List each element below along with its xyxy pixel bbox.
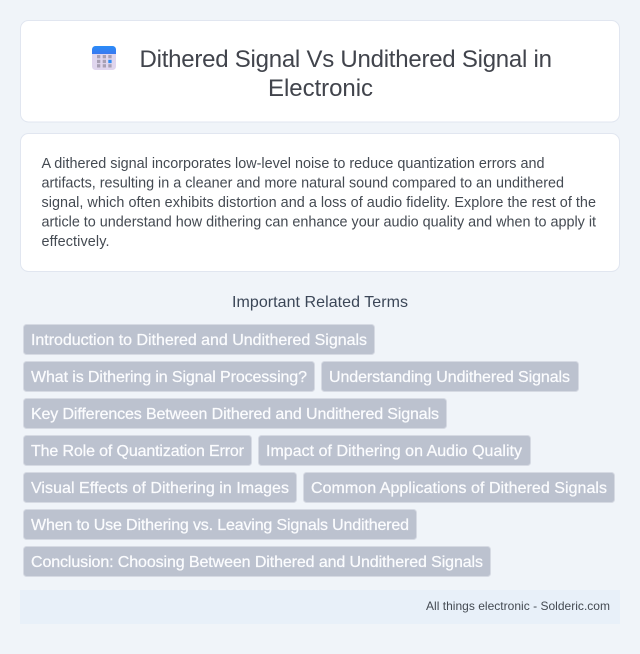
tag: conclusion: Conclusion: Choosing Between Dithered and Undithered Signals <box>31 554 483 571</box>
footer <box>20 590 620 624</box>
tag: quantization error <box>24 436 252 466</box>
tag: audio quality: Impact of Dithering on Audio Quality <box>266 443 522 460</box>
tag: understanding undithered: Understanding Undithered Signals <box>329 369 570 386</box>
text block: summary: effectively. <box>42 234 110 250</box>
tag: what is dithering <box>24 362 314 392</box>
tag: conclusion <box>24 546 490 576</box>
title <box>140 46 552 102</box>
heading: important related terms: Important Related Terms <box>232 294 408 311</box>
tag: what is dithering: What is Dithering in Signal Processing? <box>31 369 307 386</box>
icon: calendar <box>92 46 116 70</box>
text block: summary: article to understand how dithering can enhance your audio quality and when to apply it <box>42 214 596 230</box>
footer: All things electronic - Solderic.com <box>426 599 610 613</box>
panel: related terms tags <box>24 324 614 576</box>
panel: title card <box>20 20 620 122</box>
tag: introduction: Introduction to Dithered and Undithered Signals <box>31 332 367 349</box>
tag: key differences: Key Differences Between Dithered and Undithered Signals <box>31 406 439 423</box>
tag: when to use: When to Use Dithering vs. Leaving Signals Undithered <box>31 517 409 534</box>
title: Dithered Signal Vs Undithered Signal in <box>140 46 552 73</box>
tag: audio quality <box>258 436 530 466</box>
title: Electronic <box>268 75 373 102</box>
tag: introduction <box>24 324 374 354</box>
tag: quantization error: The Role of Quantization Error <box>31 443 245 460</box>
tag: understanding undithered <box>322 362 578 392</box>
tag: visual effects: Visual Effects of Dithering in Images <box>31 480 289 497</box>
text block: summary: A dithered signal incorporates low-level noise to reduce quantization errors and <box>42 156 544 172</box>
text block: summary: artifacts, resulting in a cleaner and more natural sound compared to an undithered <box>42 176 564 192</box>
tag: visual effects <box>24 472 296 502</box>
tag: key differences <box>24 398 446 428</box>
text block: summary <box>42 156 596 250</box>
panel: summary card <box>20 134 620 272</box>
tag: common applications: Common Applications of Dithered Signals <box>311 480 607 497</box>
text block: summary: signal, which often exhibits distortion and a loss of audio fidelity. Explore the rest of the <box>42 195 596 211</box>
tag: common applications <box>304 472 614 502</box>
tag: when to use <box>24 510 416 540</box>
